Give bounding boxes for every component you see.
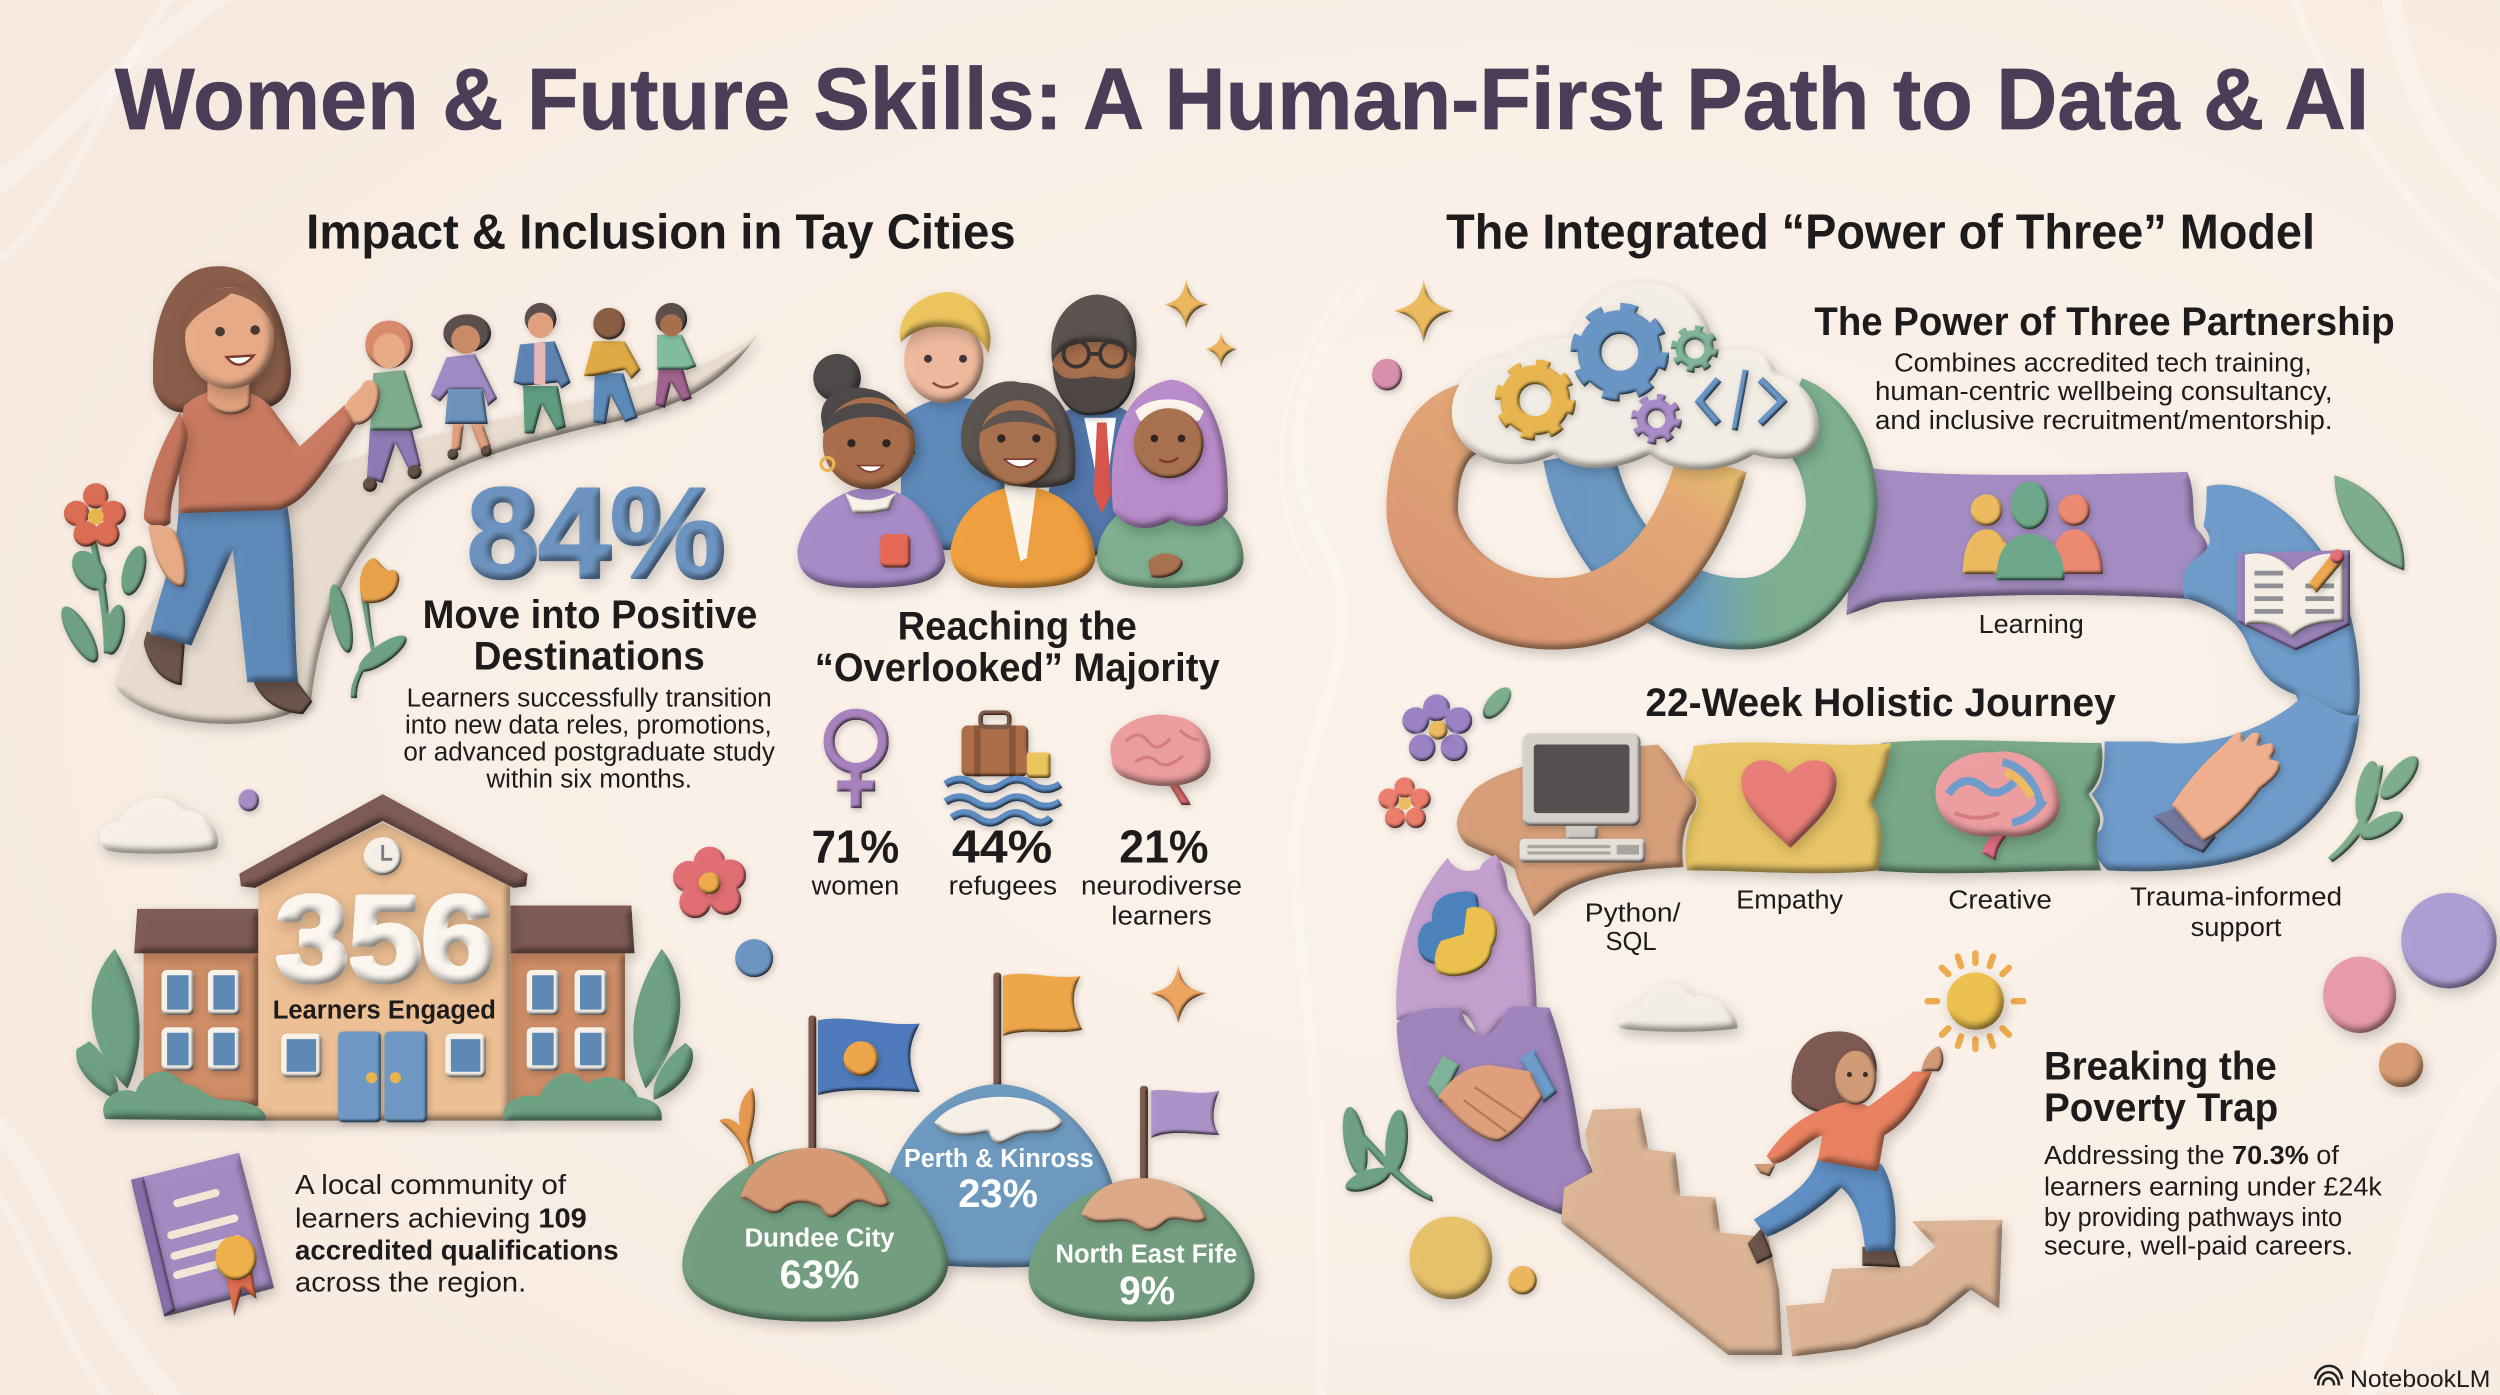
heading: reaching the overlooked majority: “Overlooked” Majority [815, 646, 1220, 690]
heading: breaking the poverty trap [2044, 1044, 2278, 1130]
heading: 22-week journey: 22-Week Holistic Journey [1645, 681, 2116, 725]
chart: regional mountains: 23% [958, 1172, 1038, 1216]
labels: journey steps: Python/ [1585, 899, 1681, 927]
text: learners transition: within six months. [485, 766, 692, 794]
stat: neurodiverse learners [1081, 821, 1242, 931]
icon: venus [829, 714, 883, 808]
text: learners transition: Learners successfully transition [407, 684, 772, 712]
labels: journey steps: support [2191, 914, 2282, 942]
illustration: beige path [115, 333, 759, 724]
illustration: decorative dot [238, 789, 259, 811]
heading: move into positive destinations: Destinations [474, 635, 705, 679]
text: local community: A local community of [295, 1169, 566, 1200]
label: learning: Learning [1979, 611, 2084, 639]
text: partnership description: Combines accredited tech training, [1894, 349, 2312, 377]
illustration: climbing girl [1747, 1031, 1944, 1267]
heading: partnership: The Power of Three Partnership [1814, 300, 2395, 344]
chart: regional mountains: 63% [780, 1253, 859, 1297]
arrow: upward path [1786, 1220, 2003, 1357]
icon: sun [1928, 953, 2023, 1049]
illustration: school with 356 learners engaged [76, 794, 693, 1122]
labels: journey steps: Empathy [1736, 887, 1843, 915]
illustration: learners walking [363, 303, 697, 492]
panel: power of three model [1338, 205, 2497, 1357]
stat: 84%: 84% [467, 463, 725, 605]
text: poverty description [2044, 1140, 2383, 1261]
logo: NotebookLM: NotebookLM [2350, 1366, 2490, 1393]
text: poverty description: secure, well-paid careers. [2044, 1231, 2353, 1261]
text: learners transition: or advanced postgraduate study [403, 738, 775, 766]
icon: brain colorful [1935, 751, 2060, 861]
text: local community: across the region. [295, 1266, 526, 1297]
heading: impact: Impact & Inclusion in Tay Cities [306, 205, 1016, 260]
stat: women [811, 821, 899, 900]
text: local community: accredited qualifications [295, 1234, 619, 1265]
text: local community: learners achieving 109 [295, 1203, 587, 1234]
icon: python [1418, 891, 1497, 976]
stat: refugees: refugees [949, 872, 1057, 900]
labels: journey steps: Trauma-informed [2130, 884, 2342, 912]
labels: journey steps: Creative [1948, 887, 2052, 915]
chart: regional mountains: 9% [1119, 1269, 1175, 1313]
stat: women: 71% [812, 821, 899, 873]
icon: hand [2152, 733, 2280, 853]
illustration: diverse group [797, 292, 1244, 588]
chart: regional mountains [682, 973, 1255, 1322]
heading: breaking the poverty trap: Poverty Trap [2044, 1086, 2278, 1130]
journey piece: blue lower arc [2092, 695, 2360, 871]
illustration: tulip [325, 558, 412, 698]
flower purple and leaf [1402, 682, 1517, 761]
leaf sprig right of journey [2328, 750, 2425, 863]
illustration: school with 356 learners engaged: Learners Engaged [273, 995, 496, 1025]
icon: brain [1110, 714, 1211, 805]
illustration: clay balls right [2323, 893, 2497, 1087]
labels: journey steps [1585, 884, 2342, 956]
chart: regional mountains: North East Fife [1055, 1241, 1237, 1269]
heading: move into positive destinations: Move into Positive [423, 593, 757, 637]
icon: open book [2237, 549, 2350, 650]
chart: regional mountains: Dundee City [745, 1225, 895, 1253]
illustration: small cloud [1618, 983, 1738, 1032]
stat: neurodiverse learners: learners [1111, 903, 1212, 931]
leaf sprig bottom-left [1338, 1105, 1433, 1202]
journey piece: tan python [1457, 745, 1697, 917]
icon: suitcase and waves [945, 713, 1060, 823]
text: partnership description [1875, 349, 2333, 435]
infinity loop [1422, 411, 1842, 614]
illustration: blue ball [735, 939, 773, 977]
journey piece: green creative [1862, 740, 2102, 873]
stat: refugees: 44% [952, 821, 1052, 873]
text: partnership description: human-centric wellbeing consultancy, [1875, 378, 2333, 406]
stat: refugees [949, 821, 1057, 900]
panel: impact and inclusion [54, 205, 1255, 1322]
journey piece: purple handshake [1397, 1006, 1594, 1215]
text: poverty description: by providing pathways into [2044, 1202, 2342, 1232]
icon: handshake [1427, 1049, 1558, 1142]
heading: move into positive destinations [423, 593, 757, 679]
text: poverty description: learners earning under £24k [2044, 1172, 2383, 1202]
illustration: yellow balls [1409, 1216, 1537, 1299]
journey piece: blue upper arc [2183, 484, 2360, 725]
text: poverty description: Addressing the 70.3% of [2044, 1140, 2340, 1170]
labels: journey steps: SQL [1606, 928, 1657, 956]
illustration: school with 356 learners engaged: 356 [276, 870, 494, 1006]
journey piece: lilac python [1396, 855, 1537, 1044]
icon: sparkle orange [1150, 965, 1207, 1024]
heading: reaching the overlooked majority [815, 604, 1220, 690]
icon: star and dot [1372, 279, 1454, 391]
icon: heart [1741, 760, 1837, 848]
illustration: woman guide [144, 266, 380, 714]
heading: breaking the poverty trap: Breaking the [2044, 1044, 2277, 1088]
illustration: stair path [1561, 1108, 1782, 1355]
heading: reaching the overlooked majority: Reaching the [898, 604, 1137, 648]
stat: neurodiverse learners: neurodiverse [1081, 872, 1242, 900]
text: learners transition [403, 684, 775, 794]
text: local community [295, 1169, 619, 1297]
journey piece: learning purple [1846, 466, 2208, 615]
icon: sparkles [1164, 279, 1237, 368]
illustration: flower [673, 847, 746, 918]
chart: regional mountains: Perth & Kinross [904, 1145, 1094, 1173]
icon: certificate book [131, 1153, 274, 1317]
stat: neurodiverse learners: 21% [1119, 821, 1209, 873]
heading: model: The Integrated “Power of Three” Model [1446, 205, 2315, 260]
text: partnership description: and inclusive recruitment/mentorship. [1875, 407, 2333, 435]
cloud with gears and code [1452, 282, 1819, 470]
icon: people group [1963, 481, 2103, 580]
flower red [1378, 777, 1431, 828]
icon: computer [1519, 733, 1645, 863]
stat: women: women [811, 872, 899, 900]
text: learners transition: into new data reles, promotions, [405, 711, 772, 739]
journey piece: yellow empathy [1684, 742, 1891, 873]
title: Women & Future Skills: A Human-First Path to Data & AI [115, 50, 2369, 148]
illustration: cloud [100, 798, 218, 854]
leaf right [2334, 475, 2404, 571]
illustration: flowers left [54, 483, 151, 668]
